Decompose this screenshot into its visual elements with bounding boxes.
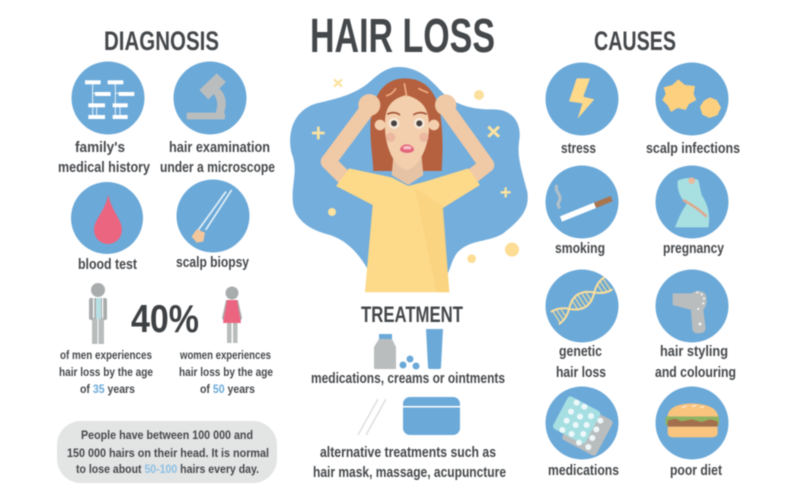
shirt: [336, 168, 480, 292]
label: hair styling and colouring: and colouring: [655, 364, 736, 381]
icon: man: [89, 283, 107, 344]
icon: scalp infections: [656, 62, 728, 136]
panel: causes: [546, 26, 740, 479]
icon: genetic DNA: [546, 270, 618, 342]
text: men statistic: of 35 years: [80, 382, 135, 396]
label: genetic hair loss: hair loss: [556, 364, 606, 381]
text: women statistic: [179, 348, 273, 396]
cheeks: [386, 133, 395, 142]
label: poor diet: poor diet: [670, 462, 722, 479]
icon: hair mask jar: [403, 397, 460, 435]
face: [385, 95, 429, 170]
title: HAIR LOSS: [310, 10, 495, 63]
label: hair examination under a microscope: [160, 139, 275, 176]
heading: causes: CAUSES: [594, 26, 676, 56]
statistic: 40%: 40%: [131, 298, 199, 341]
neck: [392, 157, 423, 185]
text: women statistic: hair loss by the age: [179, 365, 273, 379]
illustration: woman with hair loss: [290, 67, 528, 292]
text: women statistic: women experiences: [179, 348, 271, 362]
panel: 40 percent statistic: [59, 283, 273, 396]
label: genetic hair loss: [556, 343, 606, 381]
label: hair styling and colouring: hair styling: [660, 343, 728, 360]
mouth: [400, 144, 414, 153]
callout: hair count fact: to lose about 50-100 hairs every day.: [76, 462, 259, 476]
heading: treatment: TREATMENT: [361, 302, 463, 327]
text: men statistic: of men experiences: [60, 348, 152, 362]
callout: hair count fact: People have between 100 000 and: [81, 428, 253, 442]
icon: scalp biopsy: [176, 180, 250, 252]
label: medications, creams or ointments: medications, creams or ointments: [311, 370, 505, 387]
label: blood test: blood test: [78, 256, 137, 273]
label: alternative treatments: hair mask, massage, acupuncture: [313, 464, 506, 481]
label: scalp infections: scalp infections: [646, 140, 740, 157]
label: alternative treatments: [313, 444, 506, 481]
callout: hair count fact: [57, 421, 277, 483]
callout: hair count fact: 150 000 hairs on their head. It is normal: [67, 446, 269, 460]
label: hair examination under a microscope: hair examination: [169, 139, 270, 156]
hair highlights: [386, 83, 428, 97]
text: men statistic: [59, 348, 153, 396]
label: genetic hair loss: genetic: [559, 343, 602, 360]
panel: diagnosis: [58, 26, 275, 273]
label: family's medical history: [58, 139, 151, 176]
label: smoking: smoking: [555, 240, 605, 257]
text: men statistic: hair loss by the age: [59, 365, 153, 379]
label: medications: medications: [548, 462, 619, 479]
icon: medicine bottle: [374, 334, 396, 369]
icon: medication blister packs: [546, 386, 618, 460]
label: hair examination under a microscope: under a microscope: [160, 159, 275, 176]
icon: pregnancy: [656, 166, 728, 238]
hands: [358, 94, 380, 116]
arms: [328, 107, 369, 177]
label: family's medical history: medical history: [58, 159, 151, 176]
icon: cream tube: [426, 329, 443, 369]
background blob: [290, 67, 528, 277]
icon: acupuncture needles: [358, 399, 386, 435]
icon: burger: [656, 386, 728, 460]
label: scalp biopsy: scalp biopsy: [176, 254, 250, 271]
text: women statistic: of 50 years: [200, 382, 255, 396]
icon: stress lightning: [546, 62, 618, 136]
sparkles: [312, 79, 519, 263]
icon: blood drop: [71, 182, 143, 254]
label: family's medical history: family's: [75, 139, 125, 156]
icon: pills: [400, 356, 420, 370]
icon: family tree: [72, 62, 144, 134]
label: alternative treatments: alternative treatments such as: [320, 444, 496, 461]
label: hair styling and colouring: [655, 343, 736, 381]
eyes: [387, 113, 427, 129]
icon: hair dryer: [656, 270, 728, 342]
icon: smoking: [546, 166, 618, 238]
hair back: [370, 78, 443, 171]
icon: woman: [222, 286, 242, 343]
panel: treatment: [311, 302, 506, 481]
heading: diagnosis: DIAGNOSIS: [104, 26, 219, 56]
label: stress: stress: [561, 140, 596, 157]
label: pregnancy: pregnancy: [663, 240, 725, 257]
icon: microscope: [174, 62, 246, 134]
